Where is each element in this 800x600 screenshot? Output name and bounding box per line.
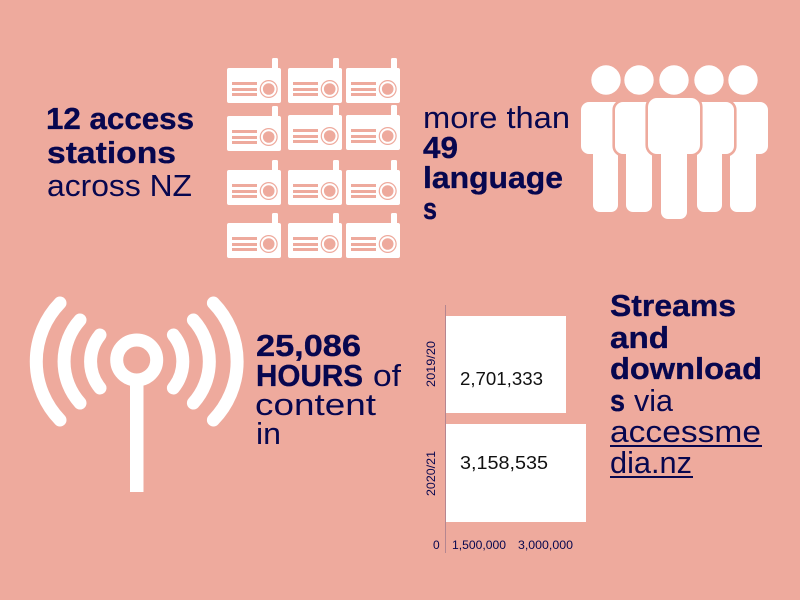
text: more than 49 languages: 49 xyxy=(423,130,458,165)
text: streams and downloads via accessmedia.nz: download xyxy=(610,351,762,386)
icon grid: 12 radios xyxy=(227,58,400,258)
text: 25,086 hours of content in: HOURS xyxy=(256,358,363,393)
axis labels: 0 xyxy=(433,538,440,552)
text: 12 access stations across NZ xyxy=(46,101,194,203)
text: 25,086 hours of content in: 25,086 xyxy=(256,328,361,363)
axis labels xyxy=(424,341,573,552)
text: 12 access stations across NZ: across NZ xyxy=(47,168,192,203)
text: streams and downloads via accessmedia.nz: via xyxy=(634,383,674,418)
text: 25,086 hours of content in: of xyxy=(373,358,401,393)
axis labels: 3,000,000 xyxy=(518,538,573,552)
text: more than 49 languages: language xyxy=(423,160,563,195)
icon: broadcast antenna xyxy=(36,303,237,492)
text: streams and downloads via accessmedia.nz xyxy=(610,288,762,480)
text: streams and downloads via accessmedia.nz: accessme xyxy=(610,414,761,449)
text: 25,086 hours of content in xyxy=(255,328,401,451)
axis labels: 2019/20 xyxy=(424,341,438,387)
axis labels: 1,500,000 xyxy=(452,538,506,552)
bar: 2019/20: 2,701,333 xyxy=(460,369,543,389)
text: more than 49 languages xyxy=(423,100,570,226)
text: streams and downloads via accessmedia.nz: s xyxy=(610,383,625,418)
text: 12 access stations across NZ: 12 access xyxy=(46,101,194,136)
bar: 2020/21: 3,158,535 xyxy=(460,453,548,473)
icon: group of people xyxy=(581,65,768,219)
axis labels: 2020/21 xyxy=(424,451,438,496)
text: 12 access stations across NZ: stations xyxy=(47,135,176,170)
bar: 2020/21 xyxy=(446,424,586,522)
bar: 2019/20 xyxy=(446,316,566,413)
bar chart: streams and downloads xyxy=(424,305,586,553)
text: streams and downloads via accessmedia.nz: and xyxy=(610,320,669,355)
text: 25,086 hours of content in: content xyxy=(255,387,376,422)
text: streams and downloads via accessmedia.nz: dia.nz xyxy=(610,445,692,480)
text: more than 49 languages: more than xyxy=(423,100,570,135)
text: 25,086 hours of content in: in xyxy=(256,416,281,451)
text: more than 49 languages: s xyxy=(423,191,437,226)
text: streams and downloads via accessmedia.nz: Streams xyxy=(610,288,736,323)
